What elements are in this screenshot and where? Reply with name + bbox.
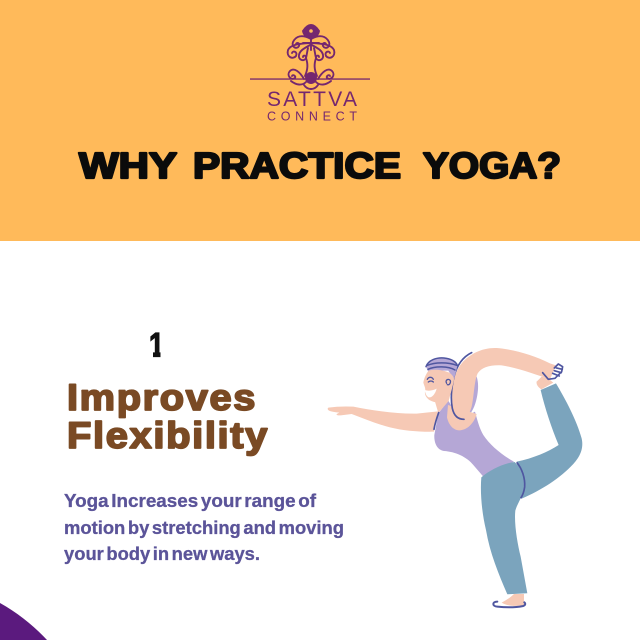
number 1: 1 <box>149 326 164 364</box>
body text <box>64 491 344 564</box>
arm outline <box>451 353 472 419</box>
hand grip <box>543 364 563 379</box>
face <box>423 370 454 403</box>
heading: Improves Flexibility: Flexibility <box>67 415 269 456</box>
heading: Improves Flexibility <box>67 377 269 456</box>
header band <box>0 0 640 241</box>
title: WHY <box>79 145 177 186</box>
outstretched arm <box>328 406 438 432</box>
corner shape: purple <box>0 603 47 640</box>
logo icon: tree <box>288 25 334 89</box>
logo: Sattva Connect <box>250 25 370 124</box>
neck <box>428 383 452 413</box>
hair <box>426 358 457 379</box>
far arm behind head <box>463 372 478 415</box>
title: YOGA? <box>423 145 561 186</box>
body text: Yoga Increases your range of <box>64 491 317 511</box>
logo rule <box>250 78 370 80</box>
smile <box>425 389 437 397</box>
heading: Improves Flexibility: Improves <box>67 377 257 418</box>
torso <box>434 401 514 477</box>
title: PRACTICE <box>193 145 401 186</box>
logo wordmark: SATTVA: SATTVA <box>267 88 357 111</box>
title <box>79 145 561 186</box>
standing leg <box>481 462 527 594</box>
illustration: yoga pose figure <box>328 348 582 607</box>
heel <box>537 377 553 389</box>
body text: your body in new ways. <box>64 544 260 564</box>
ear and eye <box>427 377 450 385</box>
raised arm <box>452 348 556 420</box>
strap line <box>434 413 439 429</box>
body text: motion by stretching and moving <box>64 518 344 538</box>
foot <box>502 594 524 606</box>
raised leg <box>517 383 582 499</box>
shoulder <box>447 405 477 430</box>
logo wordmark: CONNECT: CONNECT <box>267 110 357 124</box>
hip seam <box>517 462 525 498</box>
